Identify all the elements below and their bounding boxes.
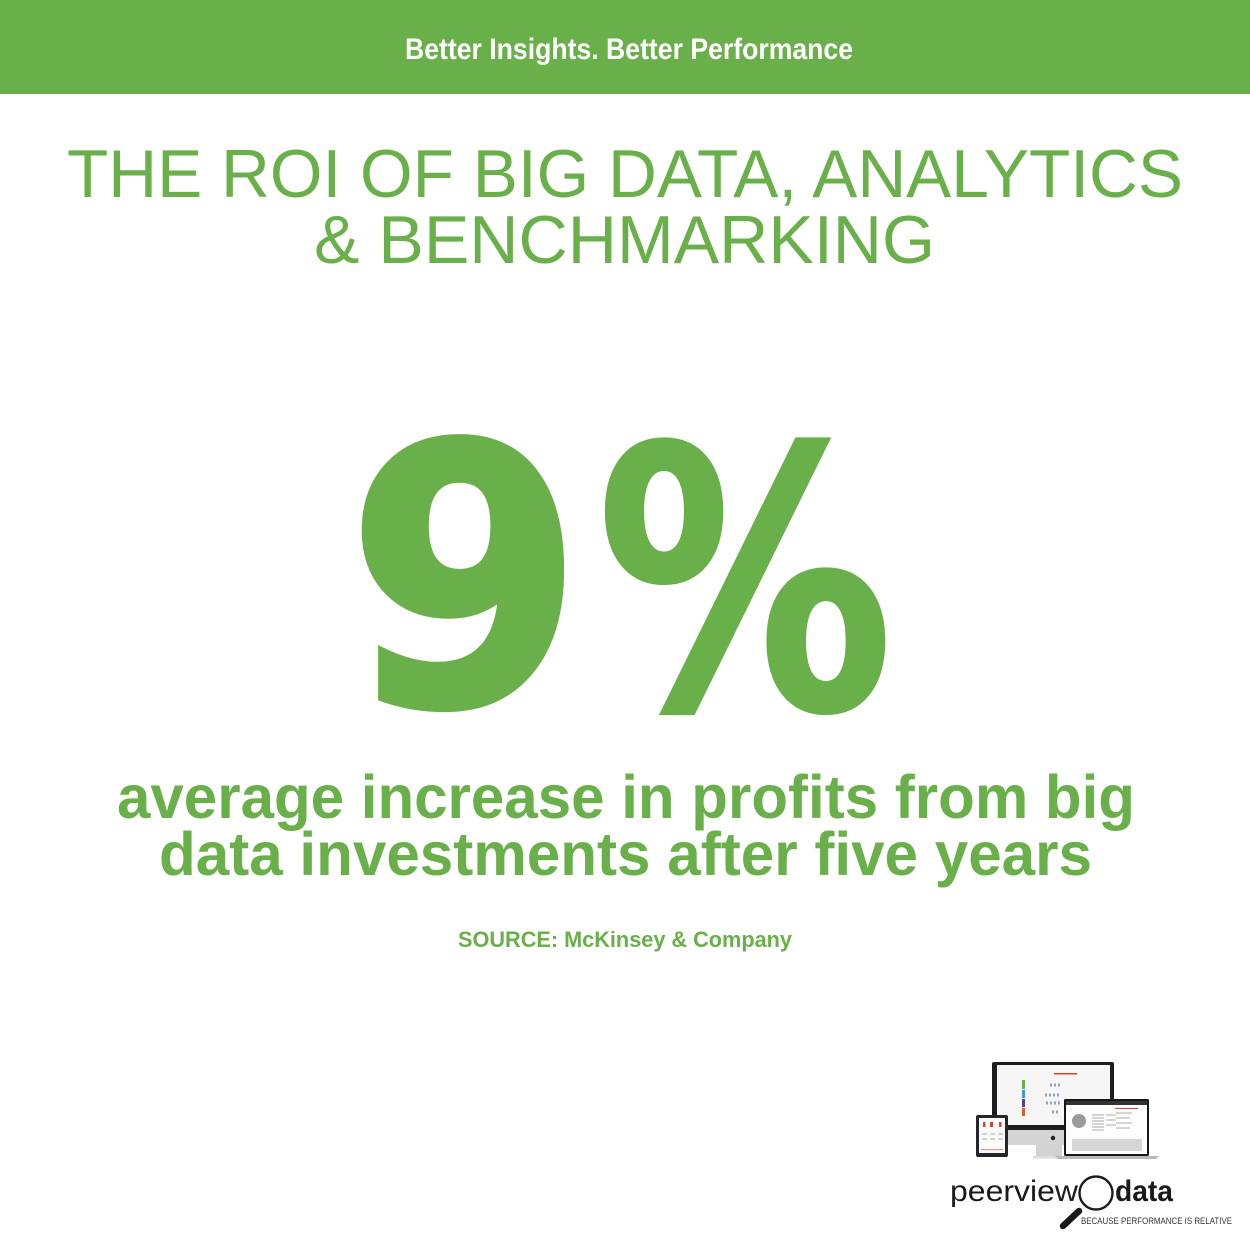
- statistic description: data investments after five years: [159, 820, 1092, 888]
- statistic description: [117, 763, 1135, 888]
- brand name: peerview: [950, 1175, 1078, 1208]
- title: THE ROI OF BIG DATA, ANALYTICS: [67, 136, 1183, 212]
- icon: tablet: [976, 1115, 1008, 1157]
- logo: peerview data wordmark: [950, 1175, 1232, 1227]
- icon: laptop: [1055, 1099, 1159, 1159]
- big statistic: 9%: 9: [347, 370, 583, 789]
- header tagline: Better Insights. Better Performance: [405, 33, 853, 66]
- header band: [0, 0, 1250, 94]
- source line: SOURCE: McKinsey & Company: [458, 927, 793, 952]
- logo: device illustration: [976, 1062, 1159, 1159]
- icon: magnifying glass: [1063, 1176, 1112, 1226]
- big statistic: 9%: [347, 370, 893, 794]
- icon: desktop monitor: [992, 1062, 1114, 1158]
- brand name bold: data: [1115, 1175, 1173, 1208]
- title: & BENCHMARKING: [314, 202, 935, 278]
- statistic description: average increase in profits from big: [117, 763, 1135, 831]
- title: [67, 136, 1183, 278]
- big statistic: 9%: %: [597, 373, 893, 794]
